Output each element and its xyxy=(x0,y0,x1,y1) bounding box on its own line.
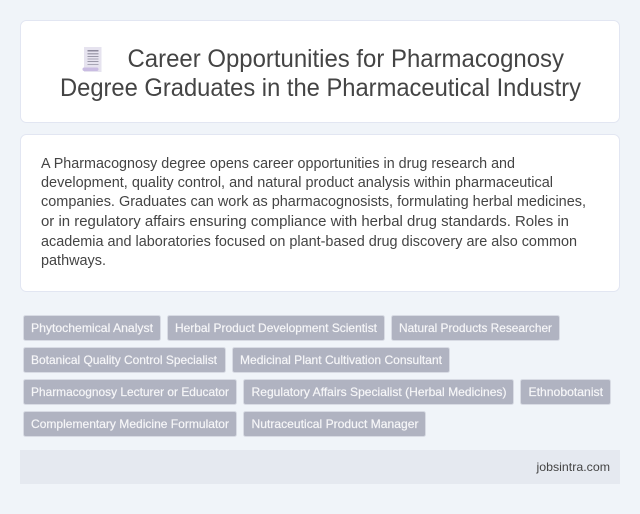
panel: description xyxy=(20,134,620,292)
tag xyxy=(392,316,560,340)
tag: Medicinal Plant Cultivation Consultant xyxy=(240,353,443,367)
text block: description: A Pharmacognosy degree opens career opportunities in drug research and xyxy=(41,156,515,172)
tag xyxy=(232,348,450,372)
tag: Ethnobotanist xyxy=(528,385,604,399)
text block: description: or in regulatory affairs ensuring compliance with herbal drug standards. Roles in xyxy=(41,214,569,230)
panel: title header xyxy=(20,20,620,122)
text block: description xyxy=(41,156,586,269)
tag: Herbal Product Development Scientist xyxy=(175,321,378,335)
text block: description: pathways. xyxy=(41,253,106,269)
text block: description: academia and laboratories focused on plant-based drug discovery are also common xyxy=(41,234,577,250)
tag xyxy=(244,412,426,436)
tag: Complementary Medicine Formulator xyxy=(31,417,229,431)
text block: description: companies. Graduates can work as pharmacognosists, formulating herbal medicines, xyxy=(41,194,586,210)
tag xyxy=(24,412,236,436)
tag: Pharmacognosy Lecturer or Educator xyxy=(31,385,229,399)
tag xyxy=(24,348,226,372)
tag xyxy=(24,316,160,340)
title: Degree Graduates in the Pharmaceutical Industry xyxy=(60,74,581,102)
title: Career Opportunities for Pharmacognosy xyxy=(128,45,564,73)
icon: document scroll xyxy=(82,47,102,72)
footer source text: jobsintra.com xyxy=(535,460,610,474)
tag list: career roles xyxy=(24,316,610,436)
tag xyxy=(168,316,384,340)
tag: Botanical Quality Control Specialist xyxy=(31,353,218,367)
tag xyxy=(520,380,610,404)
text block: description: development, quality control, and natural product analysis within pharmaceutical xyxy=(41,175,553,191)
tag xyxy=(244,380,514,404)
tag: Phytochemical Analyst xyxy=(31,321,154,335)
title xyxy=(60,45,581,102)
tag: Regulatory Affairs Specialist (Herbal Medicines) xyxy=(252,385,507,399)
tag: Natural Products Researcher xyxy=(399,321,552,335)
footer bar xyxy=(20,450,620,484)
tag xyxy=(24,380,236,404)
tag: Nutraceutical Product Manager xyxy=(252,417,418,431)
